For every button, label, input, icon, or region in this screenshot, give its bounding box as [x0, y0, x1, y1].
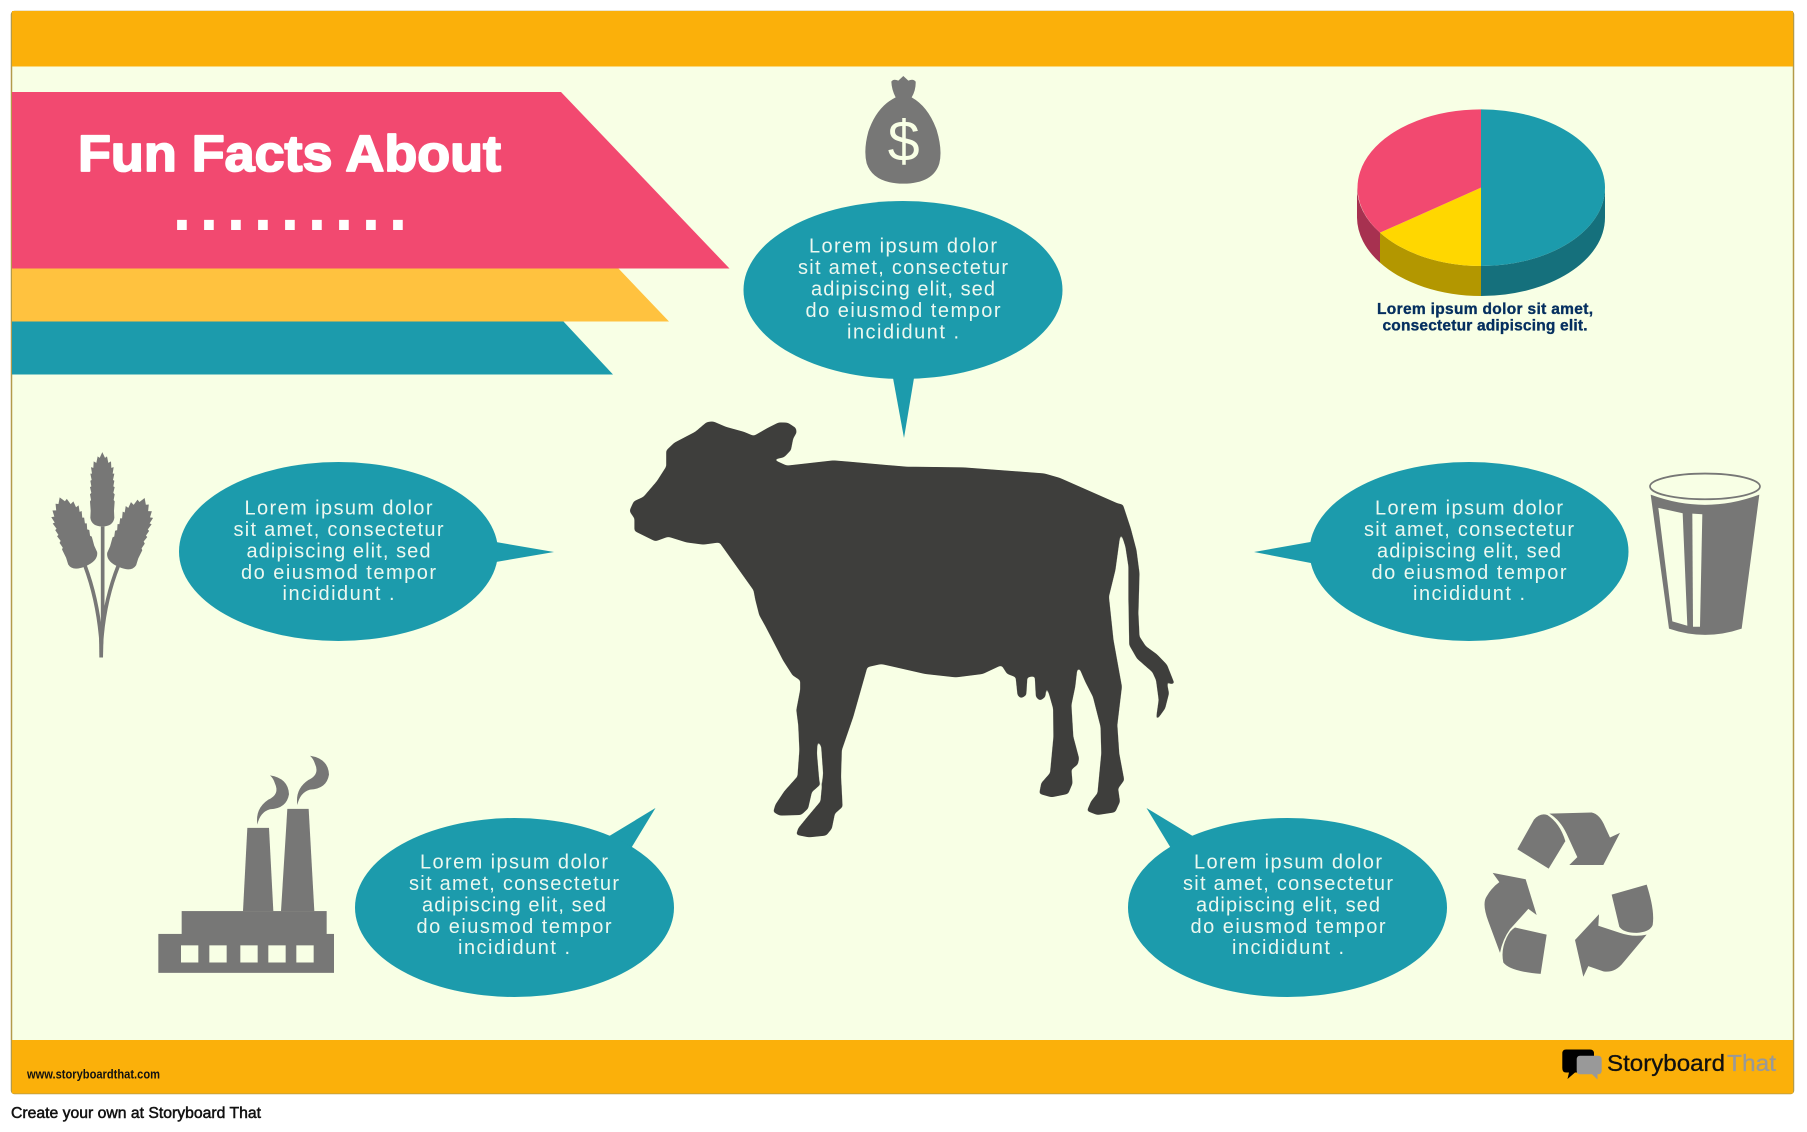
icon: money bag: $ — [888, 110, 920, 174]
banner: yellow ribbon — [12, 268, 669, 322]
callout: left speech bubble — [179, 462, 554, 641]
callout: right speech bubble: do eiusmod tempor — [1372, 562, 1567, 584]
attribution line: Create your own at Storyboard That — [11, 1105, 262, 1122]
callout: top speech bubble: incididunt . — [847, 322, 959, 344]
callout: right speech bubble: sit amet, consectetur — [1364, 519, 1574, 541]
logo: Storyboard That: Storyboard — [1607, 1050, 1725, 1076]
callout: top speech bubble: Lorem ipsum dolor — [809, 236, 997, 258]
icon: factory — [158, 756, 334, 973]
callout: left speech bubble: adipiscing elit, sed — [246, 540, 430, 562]
callout: bottom left speech bubble: do eiusmod tempor — [416, 916, 612, 938]
callout: bottom right speech bubble: incididunt . — [1232, 937, 1344, 959]
logo: Storyboard That: That — [1727, 1050, 1777, 1076]
callout: bottom left speech bubble: sit amet, consectetur — [409, 873, 619, 895]
bottom orange band — [12, 1040, 1793, 1094]
callout: bottom right speech bubble: sit amet, consectetur — [1183, 873, 1393, 895]
pie chart — [1357, 109, 1605, 296]
footer website url: www.storyboardthat.com — [26, 1068, 160, 1082]
callout: right speech bubble — [1254, 462, 1628, 641]
callout: left speech bubble: Lorem ipsum dolor — [244, 498, 433, 520]
top orange band — [12, 11, 1793, 66]
callout: bottom right speech bubble: adipiscing elit, sed — [1196, 894, 1380, 916]
callout: right speech bubble: adipiscing elit, sed — [1377, 540, 1561, 562]
callout: left speech bubble: incididunt . — [282, 583, 394, 605]
pie chart caption: Lorem ipsum dolor sit amet, — [1377, 301, 1593, 318]
icon: recycling arrows — [1485, 812, 1653, 977]
callout: bottom right speech bubble: Lorem ipsum dolor — [1194, 852, 1382, 874]
icon: wheat — [45, 452, 160, 657]
callout: bottom right speech bubble — [1128, 808, 1447, 997]
callout: bottom right speech bubble: do eiusmod tempor — [1190, 916, 1386, 938]
callout: bottom left speech bubble — [355, 808, 674, 997]
cow silhouette — [631, 422, 1174, 837]
icon: money bag — [865, 76, 941, 184]
title: Fun Facts About — [78, 125, 501, 182]
callout: bottom left speech bubble: adipiscing elit, sed — [422, 894, 606, 916]
subtitle placeholder dots: ......... — [172, 169, 415, 245]
callout: top speech bubble — [744, 201, 1062, 438]
pie chart caption: consectetur adipiscing elit. — [1382, 318, 1588, 334]
logo: Storyboard That — [1562, 1050, 1777, 1080]
callout: right speech bubble: incididunt . — [1413, 583, 1525, 605]
callout: right speech bubble: Lorem ipsum dolor — [1375, 498, 1563, 520]
callout: bottom left speech bubble: Lorem ipsum dolor — [420, 852, 608, 874]
pie chart caption — [1377, 301, 1593, 334]
banner: teal ribbon — [12, 321, 613, 374]
icon: milk glass — [1650, 474, 1760, 635]
callout: bottom left speech bubble: incididunt . — [458, 937, 570, 959]
callout: left speech bubble: sit amet, consectetur — [234, 519, 444, 541]
callout: top speech bubble: sit amet, consectetur — [798, 257, 1008, 279]
callout: left speech bubble: do eiusmod tempor — [241, 562, 436, 584]
banner: pink ribbon — [12, 92, 730, 268]
callout: top speech bubble: do eiusmod tempor — [806, 300, 1001, 322]
callout: top speech bubble: adipiscing elit, sed — [811, 278, 995, 300]
